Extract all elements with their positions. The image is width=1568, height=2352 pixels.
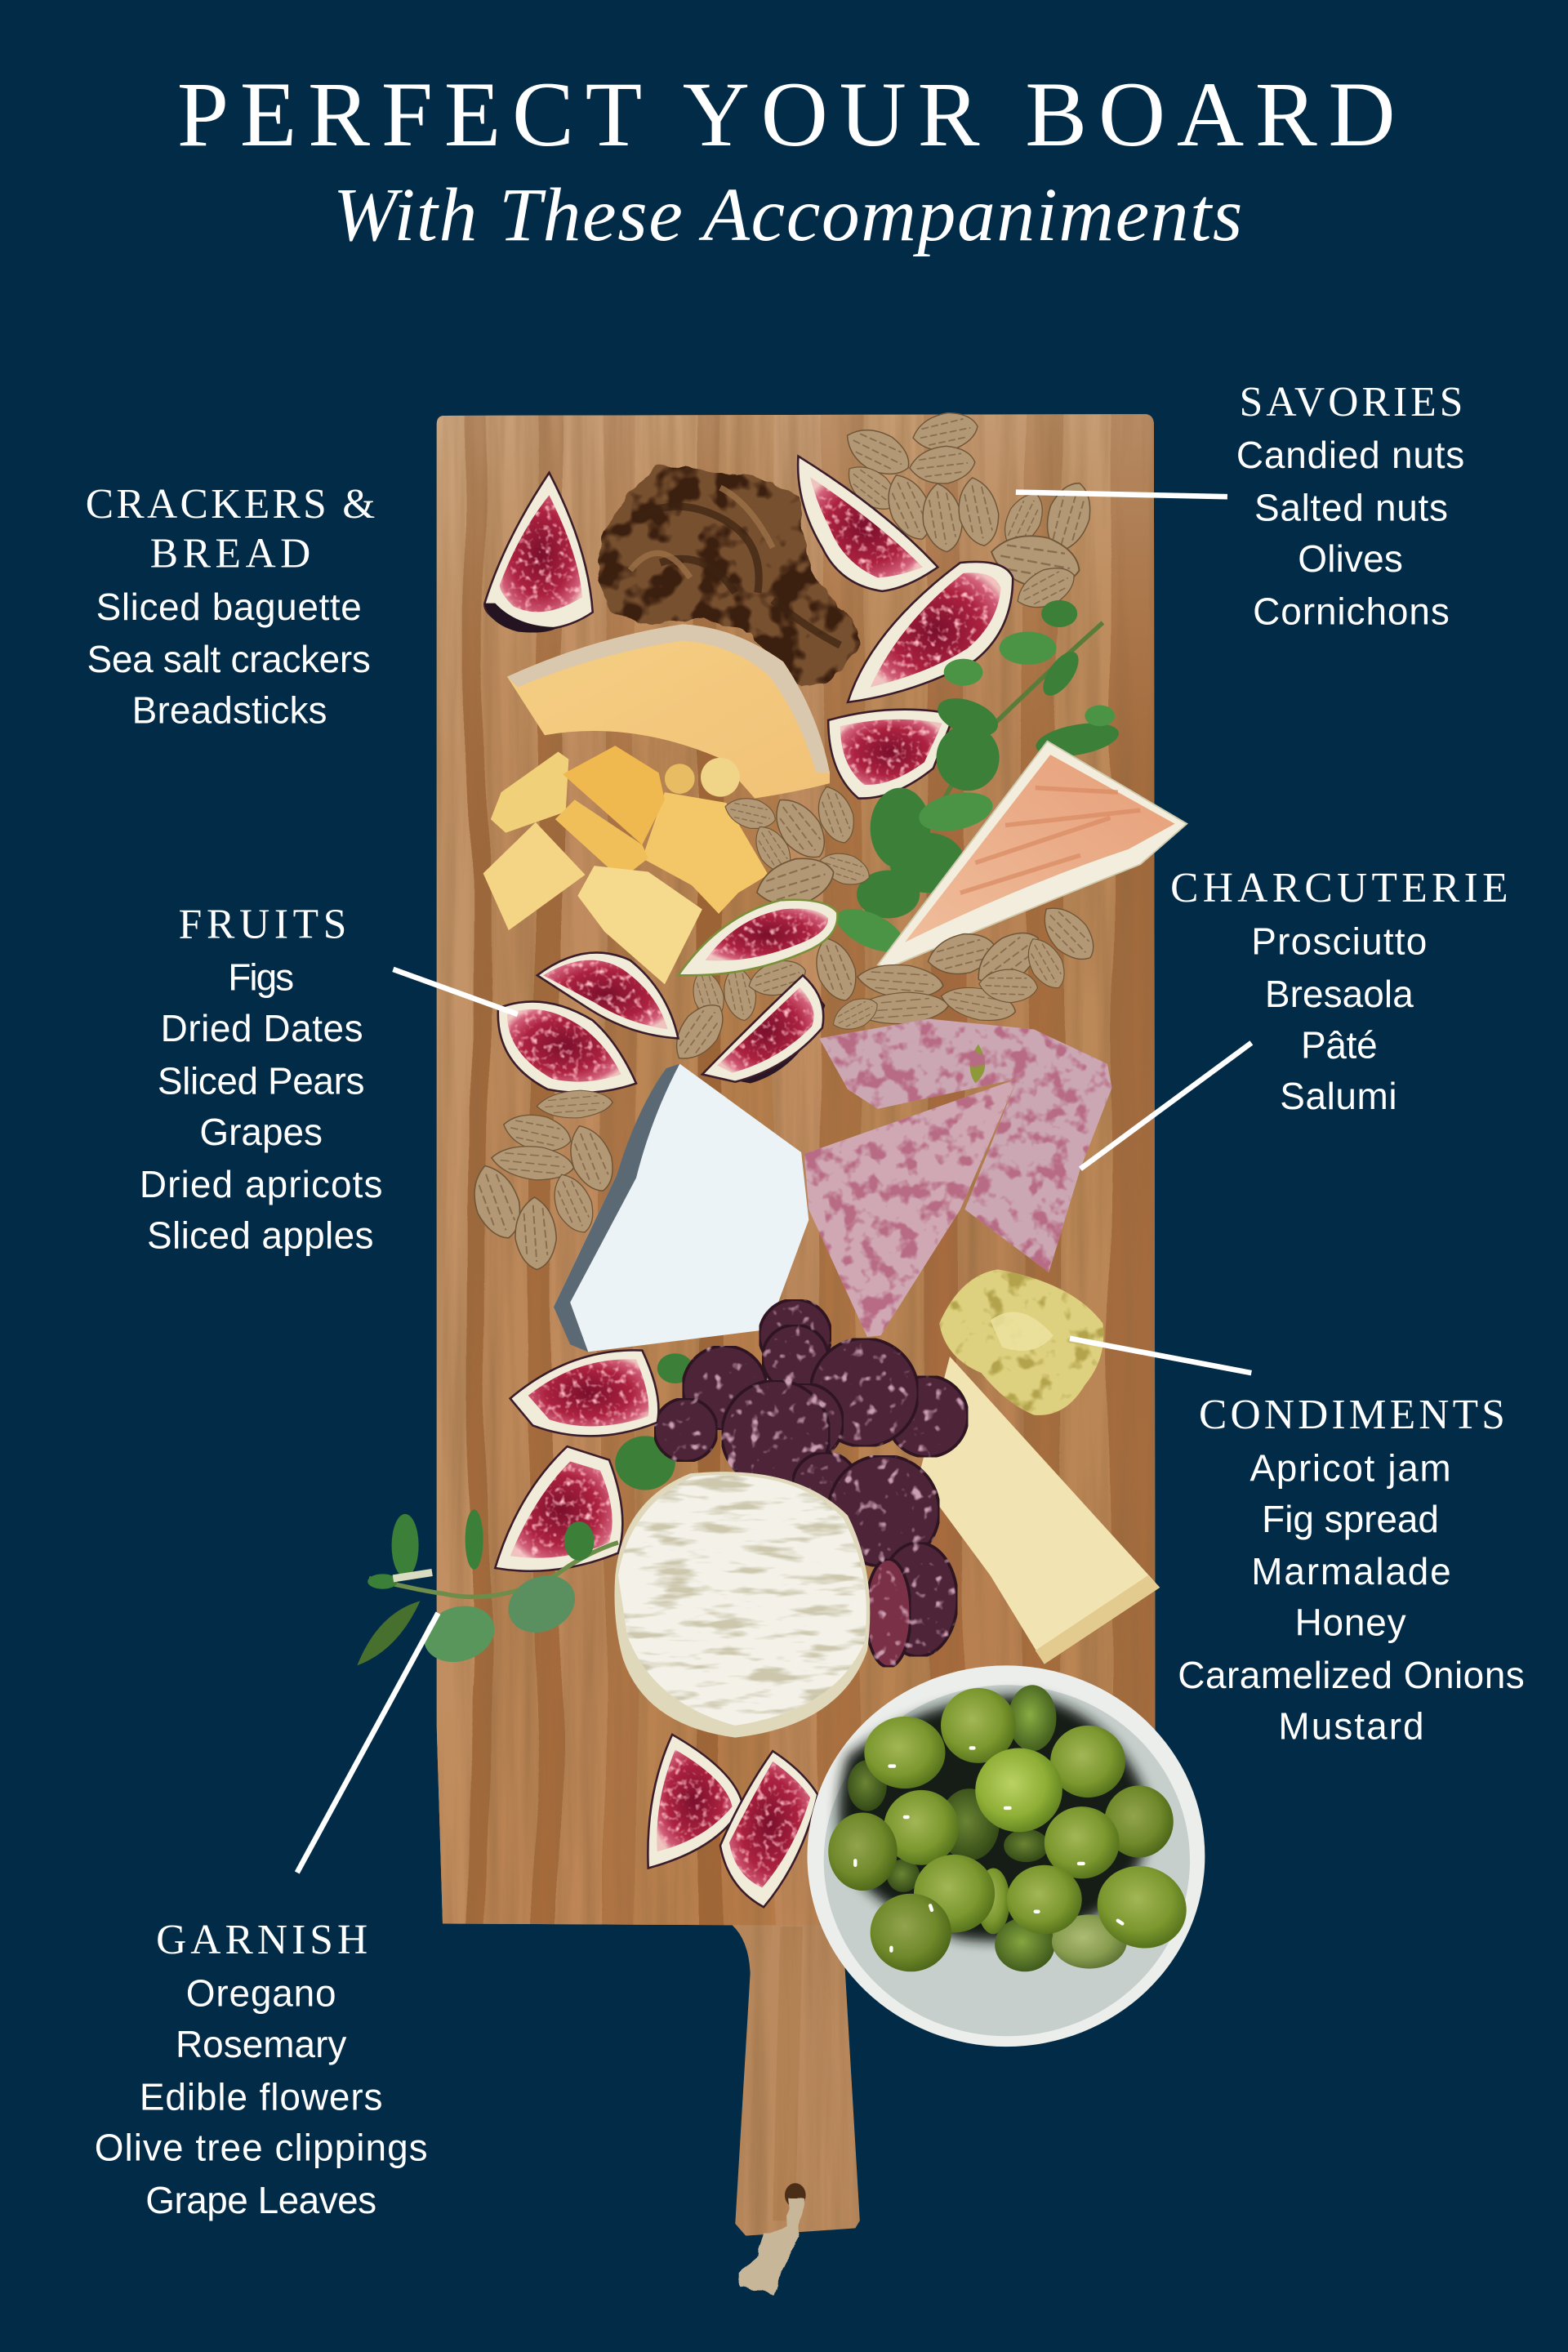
text block: condiments: Marmalade <box>1251 1550 1451 1592</box>
fig: pair by bowl right <box>720 1751 817 1907</box>
rope loop through handle hole <box>738 2183 806 2294</box>
salami slices <box>654 1299 968 1667</box>
text block: savories <box>1236 379 1464 632</box>
subtitle: With These Accompaniments <box>333 173 1242 257</box>
text block: savories: Salted nuts <box>1254 487 1448 529</box>
oregano leaves, upper right <box>831 600 1121 960</box>
date spread <box>599 466 862 686</box>
garnish: oregano sprig <box>357 1509 618 1671</box>
text block: charcuterie: Prosciutto <box>1251 920 1427 963</box>
text block: garnish: Grape Leaves <box>145 2179 376 2221</box>
text block: fruits <box>140 901 383 1257</box>
text block: crackers and bread: Sea salt crackers <box>87 638 371 680</box>
text block: fruits: Dried apricots <box>140 1163 383 1205</box>
leader line: charcuterie <box>1080 1043 1251 1169</box>
fig: top centre wedge <box>798 457 938 591</box>
text block: charcuterie <box>1170 865 1508 1117</box>
text block: savories: SAVORIES <box>1240 379 1463 425</box>
text block: crackers and bread: CRACKERS & <box>86 481 375 528</box>
text block: condiments: Honey <box>1295 1601 1406 1644</box>
pate slices <box>804 1019 1111 1337</box>
text block: garnish: GARNISH <box>156 1917 368 1963</box>
text block: crackers and bread <box>86 481 375 732</box>
almonds: left cluster <box>465 1089 621 1270</box>
text block: fruits: Dried Dates <box>161 1007 363 1049</box>
fig: right wedge <box>848 562 1013 702</box>
text block: fruits: Grapes <box>199 1111 323 1153</box>
text block: condiments: Apricot jam <box>1250 1446 1451 1489</box>
leader line: garnish <box>297 1613 438 1873</box>
bowl of green olives <box>807 1665 1205 2047</box>
text block: charcuterie: Pâté <box>1301 1023 1378 1066</box>
fig: wedge mid <box>678 900 837 975</box>
almonds: lower right cluster <box>827 897 1104 1037</box>
cheese: camembert round <box>614 1472 870 1738</box>
text block: fruits: Sliced apples <box>147 1214 373 1257</box>
cheese: rosy washed rind triangle <box>878 742 1187 968</box>
mustard dollop <box>939 1269 1103 1415</box>
cheese: pale yellow wedge <box>918 1356 1160 1664</box>
text block: fruits: FRUITS <box>179 901 346 947</box>
text block: garnish: Oregano <box>186 1971 336 2014</box>
text block: fruits: Figs <box>228 956 294 999</box>
text block: condiments: Caramelized Onions <box>1178 1654 1525 1696</box>
text block: crackers and bread: Breadsticks <box>132 689 327 732</box>
fig: lower wedge <box>495 1446 622 1571</box>
leader line: condiments <box>1070 1339 1251 1373</box>
fig: half under oregano <box>828 710 955 799</box>
cheese: crumbled chunks <box>483 746 768 984</box>
almonds: savories cluster top <box>838 408 1099 617</box>
cheese: goat log wedge <box>554 1064 808 1352</box>
text block: charcuterie: Salumi <box>1280 1075 1397 1117</box>
fig: pair by bowl left <box>648 1735 742 1868</box>
text block: savories: Candied nuts <box>1236 434 1464 476</box>
text block: condiments: CONDIMENTS <box>1199 1392 1505 1438</box>
text block: savories: Olives <box>1298 537 1403 580</box>
leader line: fruits <box>393 969 518 1014</box>
text block: condiments: Mustard <box>1278 1704 1424 1747</box>
text block: garnish: Olive tree clippings <box>95 2127 428 2169</box>
text block: fruits: Sliced Pears <box>158 1059 364 1102</box>
fig: left wedge lower <box>510 1350 658 1436</box>
fig: quarter centre left <box>537 952 678 1038</box>
text block: condiments <box>1178 1392 1525 1747</box>
leader line: savories <box>1016 492 1227 497</box>
text block: garnish <box>95 1917 428 2221</box>
almonds: middle cluster <box>665 782 874 1070</box>
text block: charcuterie: Bresaola <box>1265 973 1414 1015</box>
fig: half below <box>702 975 826 1084</box>
text block: garnish: Edible flowers <box>140 2075 383 2118</box>
wooden cutting board <box>405 390 1185 2243</box>
text block: charcuterie: CHARCUTERIE <box>1170 865 1508 911</box>
text block: condiments: Fig spread <box>1262 1498 1439 1540</box>
text block: garnish: Rosemary <box>176 2023 346 2065</box>
fig: half left <box>498 1001 636 1093</box>
text block: savories: Cornichons <box>1253 590 1450 632</box>
leaves behind salami <box>615 1353 693 1490</box>
cheese: aged hard wedge <box>507 624 830 798</box>
text block: crackers and bread: Sliced baguette <box>96 586 362 628</box>
text block: crackers and bread: BREAD <box>150 531 310 577</box>
title: PERFECT YOUR BOARD <box>177 62 1396 166</box>
fig: top left wedge <box>484 473 593 633</box>
